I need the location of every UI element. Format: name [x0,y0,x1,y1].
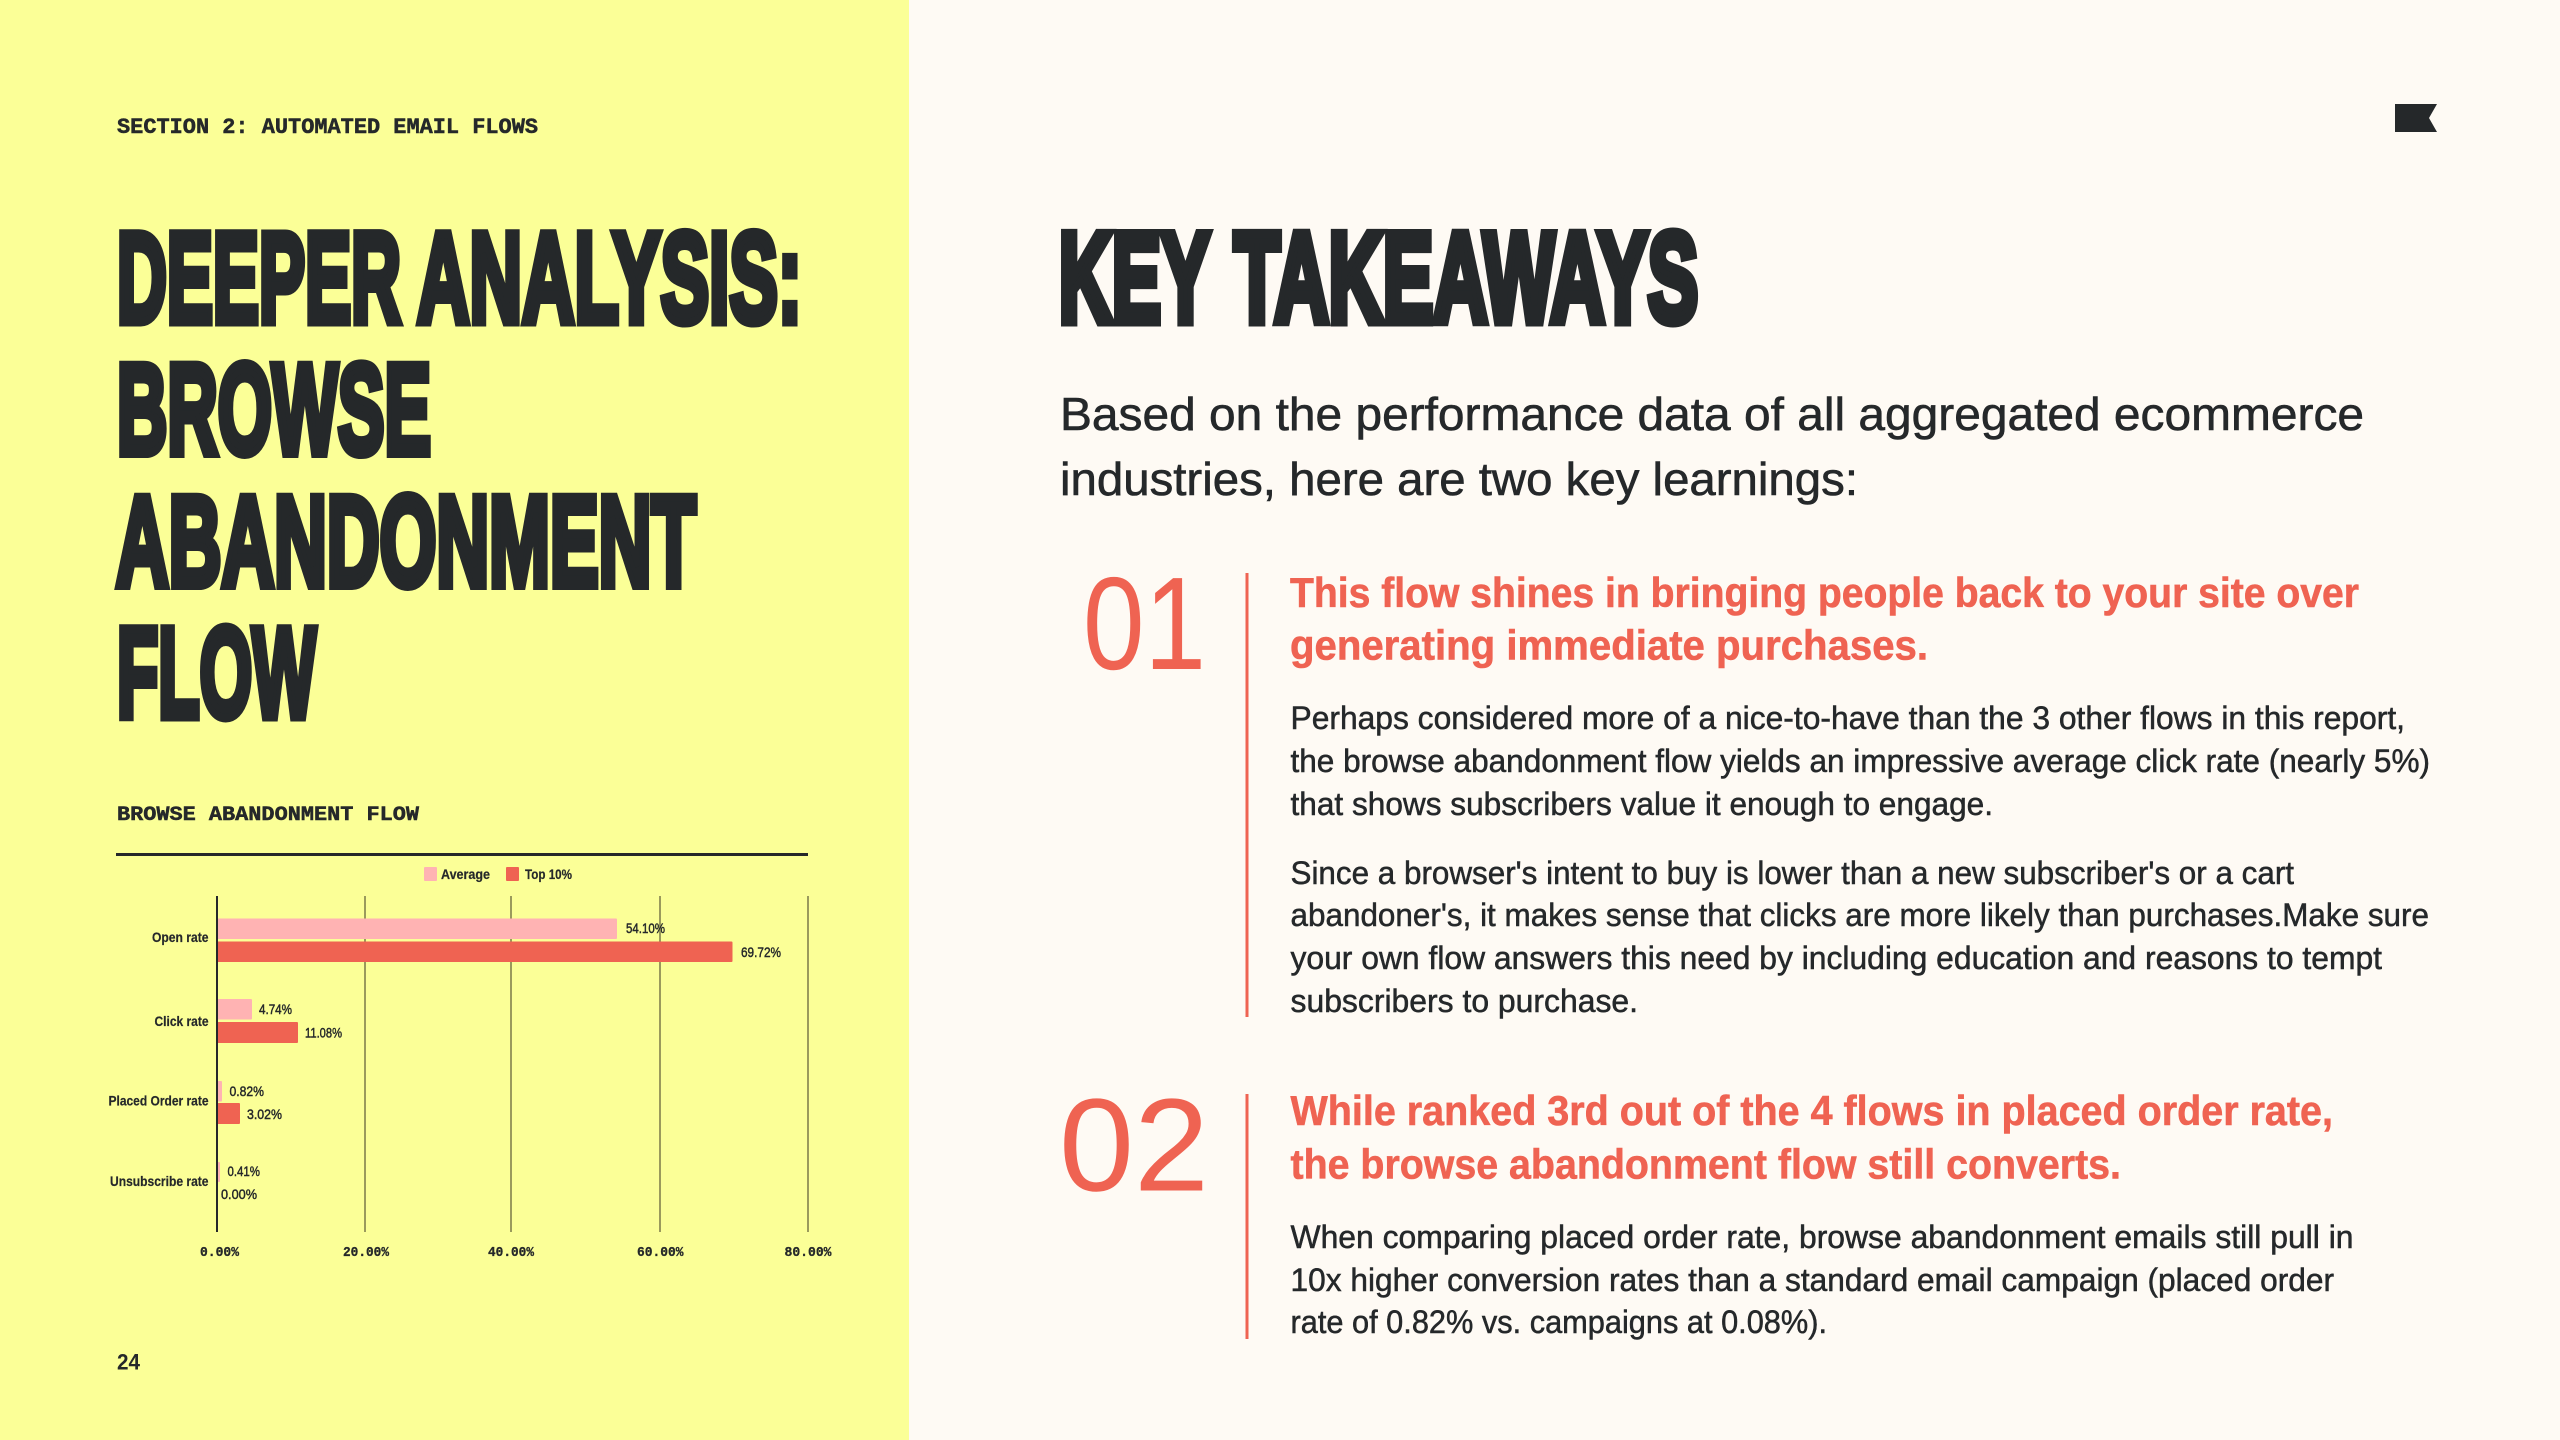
heading: deeper analysis: BROWSE [117,338,431,482]
heading: deeper analysis: FLOW [117,602,316,745]
bars: open rate: 69.72% [741,945,781,960]
takeaway 01 paragraph 2: Since a browser's intent to buy is lower than a new subscriber's or a cart [1290,855,2294,891]
heading: key takeaways: KEY [1059,206,1210,348]
takeaway 01 heading: This flow shines in bringing people back to your site over [1290,569,2359,616]
bars: click rate: 11.08% [305,1026,342,1040]
intro text [1060,388,2364,505]
takeaway 01 paragraph 2: abandoner's, it makes sense that clicks are more likely than purchases.Make sure [1290,897,2429,933]
takeaway 01 paragraph 2: your own flow answers this need by including education and reasons to tempt [1290,940,2382,976]
bars: click rate: 4.74% [259,1002,292,1017]
takeaway 02 paragraph: rate of 0.82% vs. campaigns at 0.08%). [1290,1304,1827,1340]
bar chart: browse abandonment flow [108,867,832,1261]
panel: key takeaways [1059,104,2437,1340]
takeaway 01 paragraph 1: that shows subscribers value it enough to engage. [1290,786,1993,822]
intro text: Based on the performance data of all aggregated ecommerce [1060,388,2364,440]
intro text: industries, here are two key learnings: [1060,453,1858,505]
x axis labels: 40.00% [488,1246,535,1261]
takeaway 01 paragraph 1: the browse abandonment flow yields an impressive average click rate (nearly 5%) [1290,743,2430,779]
heading: deeper analysis [116,207,802,745]
bars: unsubscribe rate [110,1162,260,1202]
takeaway 02 heading [1290,1087,2333,1188]
x axis labels: 20.00% [343,1246,390,1261]
number 02: 02 [1059,1072,1209,1218]
heading: deeper analysis: ANALYSIS: [417,207,802,350]
page number: 24 [117,1350,141,1374]
icon: logo flag [2395,104,2437,132]
bars: click rate [154,999,342,1043]
chart legend [424,867,572,882]
section label: SECTION 2: AUTOMATED EMAIL FLOWS [117,115,538,140]
takeaway 01 paragraph 1 [1290,700,2430,822]
takeaway 02 paragraph: When comparing placed order rate, browse abandonment emails still pull in [1290,1219,2354,1255]
x axis labels: 0.00% [200,1246,240,1261]
takeaway 02 paragraph: 10x higher conversion rates than a standard email campaign (placed order [1290,1262,2334,1298]
takeaway 02 heading: the browse abandonment flow still converts. [1290,1140,2121,1188]
number 01: 01 [1083,550,1206,697]
x axis labels: 80.00% [784,1246,832,1261]
bars: placed order rate: 3.02% [247,1107,282,1122]
bars: placed order rate [108,1081,282,1124]
chart legend: Top 10% [525,867,572,882]
bars: placed order rate: Placed Order rate [108,1094,209,1109]
bars: open rate: 54.10% [626,921,665,936]
takeaway 01 paragraph 2 [1290,855,2429,1019]
chart title: BROWSE ABANDONMENT FLOW [117,804,419,827]
takeaway 02 heading: While ranked 3rd out of the 4 flows in placed order rate, [1290,1087,2333,1134]
bars: placed order rate: 0.82% [230,1084,264,1099]
takeaway 01 paragraph 1: Perhaps considered more of a nice-to-have than the 3 other flows in this report, [1290,700,2405,736]
bars: open rate [152,918,781,962]
x axis labels [200,1246,832,1261]
takeaway 01 paragraph 2: subscribers to purchase. [1290,983,1638,1019]
takeaway 01 heading: generating immediate purchases. [1290,622,1928,668]
heading: key takeaways [1059,206,1698,348]
takeaway 01 [1083,550,2430,1019]
heading: deeper analysis: DEEPER [117,207,401,350]
heading: deeper analysis: ABANDONMENT [116,470,696,614]
bars: unsubscribe rate: 0.00% [221,1187,257,1202]
bars: unsubscribe rate: Unsubscribe rate [110,1174,209,1189]
panel: yellow left panel [0,0,909,1440]
chart legend: Average [441,867,490,882]
x axis labels: 60.00% [637,1246,684,1261]
bars: unsubscribe rate: 0.41% [228,1164,260,1179]
heading: key takeaways: TAKEAWAYS [1234,206,1698,348]
takeaway 02 paragraph [1290,1219,2354,1340]
bars: open rate: Open rate [152,930,209,945]
takeaway 01 heading [1290,569,2359,668]
bars: click rate: Click rate [154,1014,209,1029]
takeaway 02 [1059,1072,2354,1340]
